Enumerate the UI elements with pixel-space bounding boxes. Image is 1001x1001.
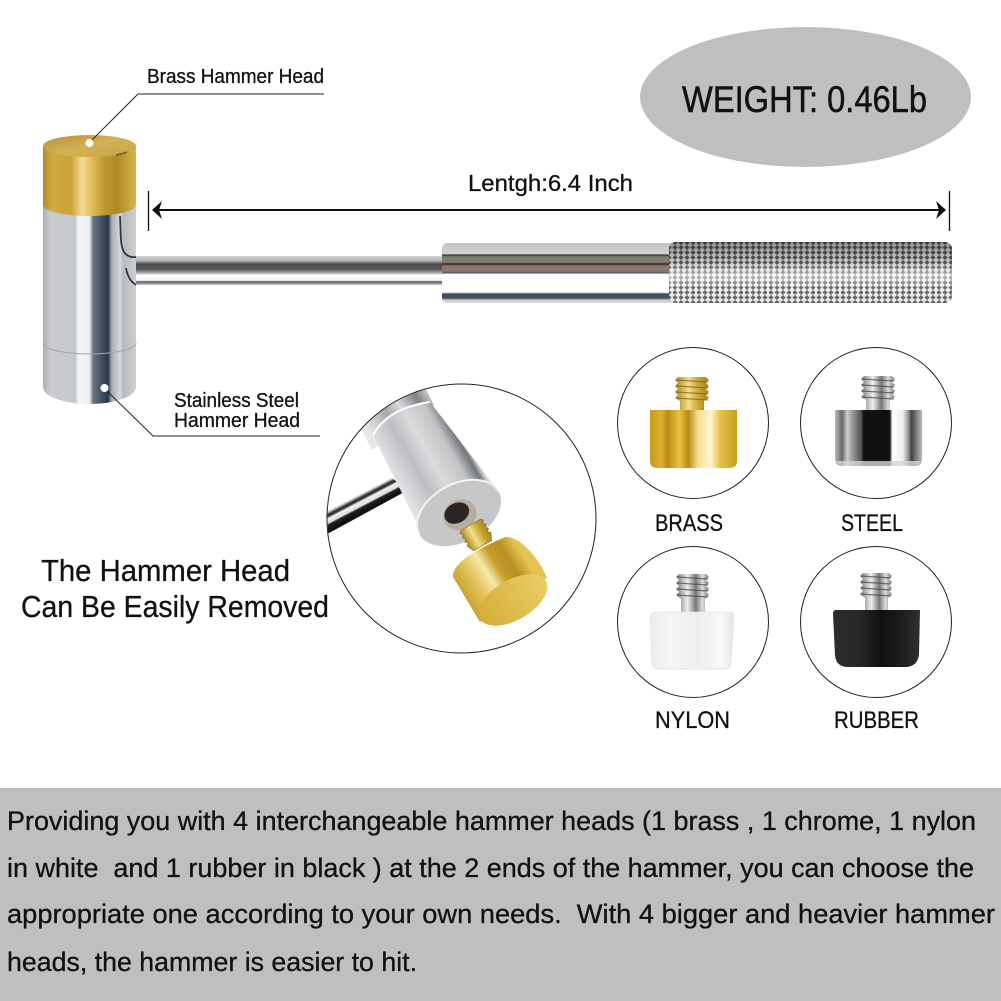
- callout: brass hammer head: Brass Hammer Head: [147, 66, 324, 88]
- weight badge: WEIGHT: 0.46Lb: [682, 79, 927, 120]
- option: brass head: BRASS: [655, 510, 723, 537]
- length dimension arrow: Lentgh:6.4 Inch: [468, 170, 633, 196]
- circle: head removal detail: [320, 368, 596, 653]
- option: nylon head: [618, 546, 768, 734]
- upper hammer section: [362, 390, 434, 450]
- brass insert thread: [460, 518, 492, 552]
- description text: in white and 1 rubber in black ) at the 2 ends of the hammer, you can choose the: [7, 853, 974, 883]
- hammer illustration: [43, 135, 952, 404]
- option: rubber head: RUBBER: [834, 707, 919, 734]
- option: steel head: [800, 348, 952, 537]
- removable head note: Can Be Easily Removed: [21, 589, 329, 624]
- rubber head thread: [860, 573, 892, 612]
- cylinder end face with hole: [416, 478, 501, 546]
- description text: Providing you with 4 interchangeable hammer heads (1 brass , 1 chrome, 1 nylon: [7, 806, 976, 836]
- option: rubber head: [800, 546, 952, 734]
- hammer grip: [442, 243, 677, 303]
- steel thread: [861, 376, 895, 411]
- brass insert body: [453, 537, 547, 622]
- weight badge: [640, 27, 971, 167]
- brass hammer body: [43, 146, 136, 216]
- callout: brass hammer head: [86, 66, 324, 147]
- hammer rod: [130, 256, 443, 285]
- callout: stainless steel hammer head: Hammer Head: [174, 410, 300, 432]
- removable head note: [21, 553, 329, 624]
- description text: [7, 806, 995, 977]
- callout: stainless steel hammer head: [100, 384, 320, 436]
- knurled handle: [669, 242, 952, 303]
- length dimension arrow: [148, 170, 950, 231]
- callout: stainless steel hammer head: Stainless Steel: [174, 390, 299, 412]
- brass thread: [675, 377, 709, 411]
- steel hammer body: [43, 205, 136, 404]
- angled rod: [328, 478, 402, 534]
- option: brass head: [618, 348, 768, 537]
- description text: heads, the hammer is easier to hit.: [7, 947, 417, 977]
- option: nylon head: NYLON: [655, 707, 730, 734]
- angled steel cylinder: [373, 402, 500, 525]
- description text: appropriate one according to your own needs. With 4 bigger and heavier hammer: [7, 899, 995, 929]
- option: steel head: STEEL: [841, 510, 903, 537]
- removable head note: The Hammer Head: [41, 553, 290, 588]
- footer description panel: [0, 788, 1001, 1001]
- nylon head thread: [676, 574, 709, 614]
